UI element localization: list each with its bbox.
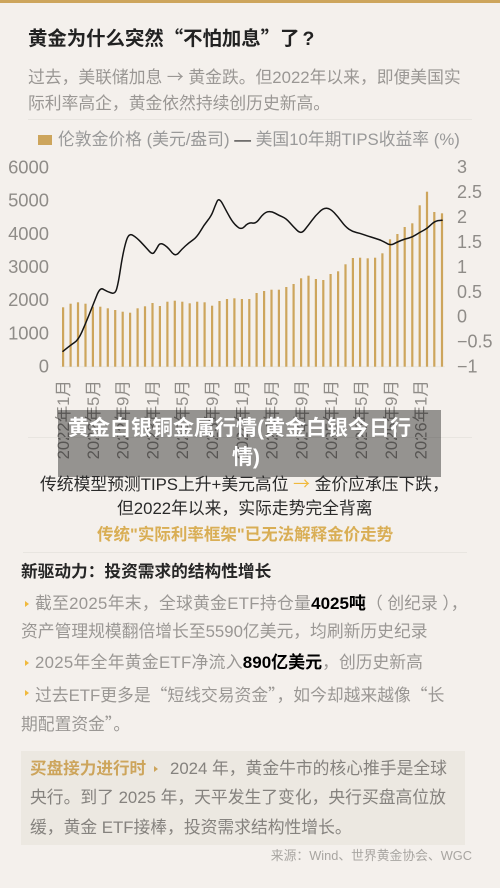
title: 黄金为什么突然“不怕加息”了? [28, 22, 314, 51]
panel: central bank handoff: 2024 年，黄金牛市的核心推手是全球 [170, 759, 447, 778]
x axis month labels: 2024年5月 [263, 380, 282, 459]
panel: central bank handoff [21, 751, 465, 845]
bullet list: ETF data: 资产管理规模翻倍增长至5590亿美元，均刷新历史纪录 [21, 622, 428, 641]
bullet list: ETF data: 期配置资金”。 [21, 711, 130, 735]
left axis labels: 6000 [8, 156, 49, 178]
x axis month labels: 2024年9月 [292, 380, 311, 459]
intro text: 过去，美联储加息 → 黄金跌。但2022年以来，即便美国实 [28, 64, 461, 88]
gold price bars [62, 192, 443, 367]
model contradiction callout: 但2022年以来，实际走势完全背离 [117, 499, 372, 518]
TIPS yield line [63, 200, 442, 351]
panel: central bank handoff: 买盘接力进行时 [30, 759, 146, 778]
bullet list: ETF data [21, 594, 468, 735]
section heading: new driver: 新驱动力：投资需求的结构性增长 [21, 562, 271, 581]
right axis labels: −0.5 [457, 332, 493, 352]
x axis month labels: 2022年5月 [84, 380, 103, 459]
intro text: 际利率高企，黄金依然持续创历史新高。 [28, 94, 330, 113]
model contradiction callout [40, 471, 449, 544]
right axis labels: 2 [457, 207, 467, 227]
bullet list: ETF data: 2025年全年黄金ETF净流入890亿美元，创历史新高 [35, 653, 423, 672]
bullet list: ETF data: 过去ETF更多是“短线交易资金”，如今却越来越像“长 [35, 682, 444, 706]
left axis labels: 1000 [8, 322, 49, 344]
x axis month labels: 2023年1月 [143, 380, 162, 459]
top accent bar [0, 0, 500, 3]
right axis labels: 3 [457, 157, 467, 177]
panel: central bank handoff: 缓，黄金 ETF接棒，投资需求结构性增长。 [30, 818, 352, 837]
left axis labels [8, 156, 49, 377]
left axis labels: 2000 [8, 289, 49, 310]
right axis labels [457, 157, 493, 376]
x axis month labels: 2022年1月 [54, 380, 73, 459]
right axis labels: 0 [457, 306, 467, 326]
right axis labels: 2.5 [457, 182, 482, 202]
left axis labels: 4000 [8, 223, 49, 244]
x axis month labels: 2023年5月 [173, 380, 192, 459]
left axis labels: 5000 [8, 190, 49, 211]
combo chart: gold price bars and TIPS yield line [8, 156, 493, 459]
chart legend: 伦敦金价格 (美元/盎司) — 美国10年期TIPS收益率 (%) [58, 130, 460, 149]
right axis labels: 0.5 [457, 282, 482, 302]
overlay title banner [58, 410, 441, 477]
overlay title banner: 黄金白银铜金属行情(黄金白银今日行 [68, 417, 411, 440]
left axis labels: 3000 [8, 256, 49, 277]
x axis month labels: 2023年9月 [203, 380, 222, 459]
x axis month labels: 2025年1月 [322, 380, 341, 459]
x axis month labels [54, 380, 431, 459]
left axis labels: 0 [39, 356, 49, 377]
x axis month labels: 2022年9月 [114, 380, 133, 459]
x axis month labels: 2025年9月 [382, 380, 401, 459]
panel: central bank handoff: 央行。到了 2025 年，天平发生了变化，央行买盘高位放 [30, 788, 446, 807]
right axis labels: 1 [457, 257, 467, 277]
overlay title banner: 情) [232, 446, 260, 469]
model contradiction callout: 传统模型预测TIPS上升+美元高位 → 金价应承压下跌， [40, 471, 449, 495]
x axis month labels: 2026年1月 [412, 380, 431, 459]
right axis labels: −1 [457, 356, 478, 376]
intro text [28, 64, 461, 113]
source note: 来源：Wind、世界黄金协会、WGC [271, 848, 472, 863]
x axis month labels: 2025年5月 [352, 380, 371, 459]
x axis month labels: 2024年1月 [233, 380, 252, 459]
model contradiction callout: 传统"实际利率框架"已无法解释金价走势 [97, 526, 393, 544]
right axis labels: 1.5 [457, 232, 482, 252]
bullet list: ETF data: 截至2025年末，全球黄金ETF持仓量4025吨（ 创纪录 ）， [35, 594, 468, 613]
